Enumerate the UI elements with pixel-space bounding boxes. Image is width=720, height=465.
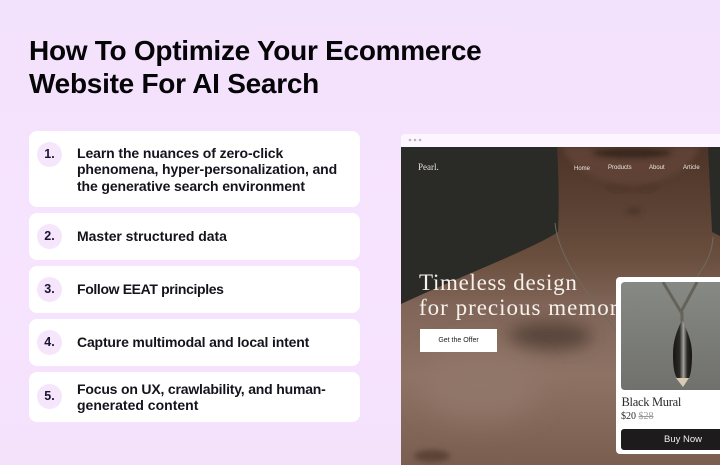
buy button: Buy Now [664, 434, 702, 445]
step 1 text: the generative search environment [77, 178, 305, 194]
step 2 number: 2. [44, 229, 55, 243]
panel: website mockup [401, 134, 720, 465]
step 1 text [77, 144, 337, 194]
panel: step 3 [29, 266, 360, 313]
nav home: Home [574, 166, 590, 172]
product card [616, 277, 720, 454]
product price: $20 $28 [621, 411, 654, 422]
browser bar [401, 134, 720, 147]
step 3 number [37, 277, 62, 302]
offer button [420, 329, 497, 352]
navigation [574, 164, 700, 172]
step 5 text: generated content [77, 397, 198, 413]
hero headline: for precious memories [419, 294, 647, 320]
step 3 number: 3. [44, 282, 55, 296]
step 5 number [37, 384, 62, 409]
title [29, 35, 481, 99]
step 5 number: 5. [44, 389, 55, 403]
step 5 text: Focus on UX, crawlability, and human- [77, 380, 326, 396]
hero headline [419, 270, 647, 320]
step 3 text: Follow EEAT principles [77, 281, 224, 297]
step 4 number: 4. [44, 335, 55, 349]
panel: step 4 [29, 319, 360, 366]
product photo [621, 282, 720, 390]
buy button [621, 429, 720, 450]
panel: step 1 [29, 131, 360, 207]
hero photo [401, 147, 720, 465]
step 1 text: Learn the nuances of zero-click [77, 144, 283, 160]
step 5 text [77, 380, 326, 413]
step 1 number: 1. [44, 147, 55, 161]
logo: Pearl. [418, 162, 439, 172]
step 4 number [37, 330, 62, 355]
step 2 number [37, 224, 62, 249]
step 2 text: Master structured data [77, 228, 227, 244]
nav products: Products [608, 165, 632, 171]
nav article: Article [683, 165, 700, 171]
product name: Black Mural [622, 395, 681, 409]
panel: step 2 [29, 213, 360, 260]
nav about: About [649, 165, 665, 171]
step 1 number [37, 142, 62, 167]
title: Website For AI Search [29, 68, 319, 99]
panel: step 5 [29, 372, 360, 422]
step 4 text: Capture multimodal and local intent [77, 334, 309, 350]
window dots [408, 138, 422, 142]
offer button: Get the Offer [438, 337, 479, 344]
step 1 text: phenomena, hyper-personalization, and [77, 161, 337, 177]
title: How To Optimize Your Ecommerce [29, 35, 481, 66]
hero headline: Timeless design [419, 270, 578, 295]
